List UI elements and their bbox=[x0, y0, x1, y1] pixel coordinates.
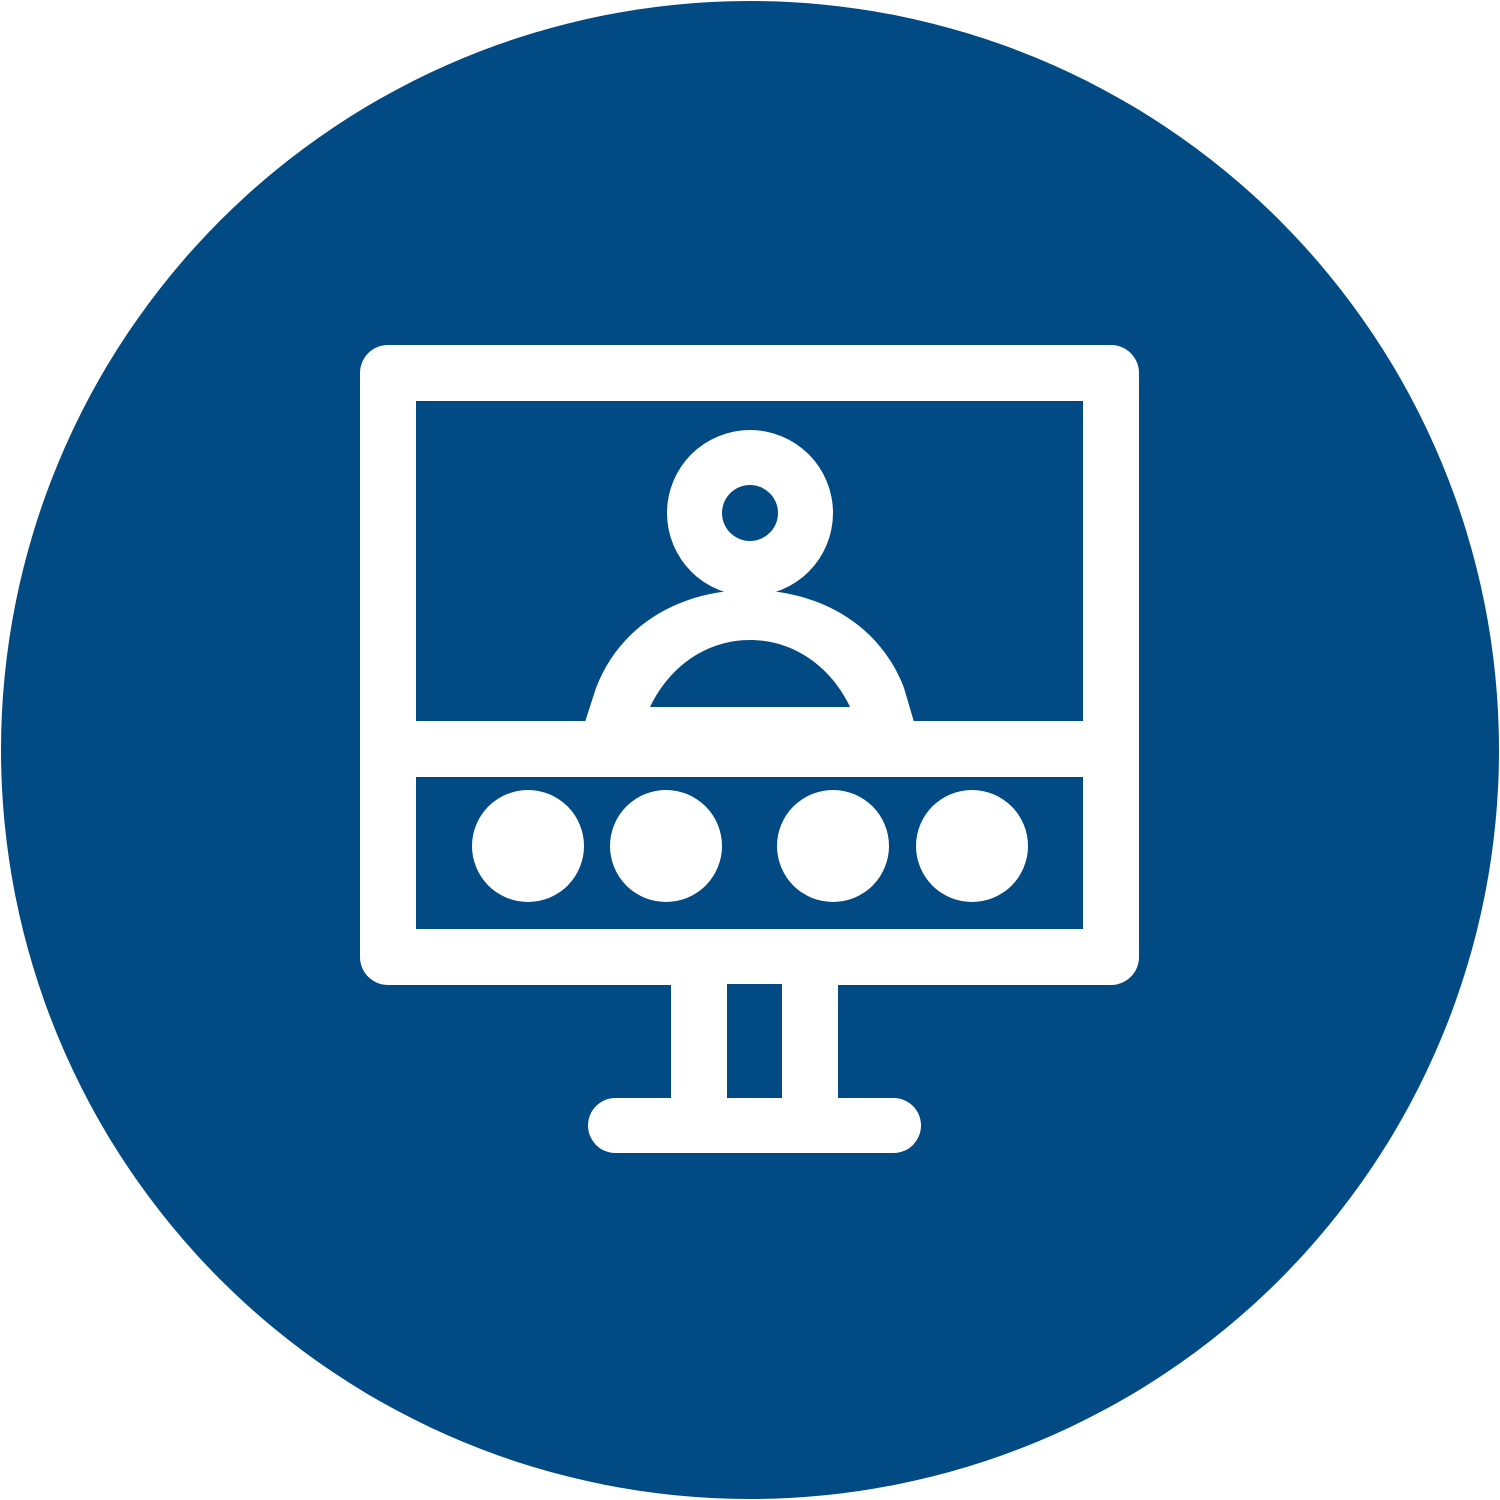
monitor stand bbox=[588, 984, 921, 1153]
presenter person bbox=[585, 430, 914, 722]
participant dots bbox=[472, 790, 1028, 902]
monitor bbox=[360, 345, 1139, 985]
